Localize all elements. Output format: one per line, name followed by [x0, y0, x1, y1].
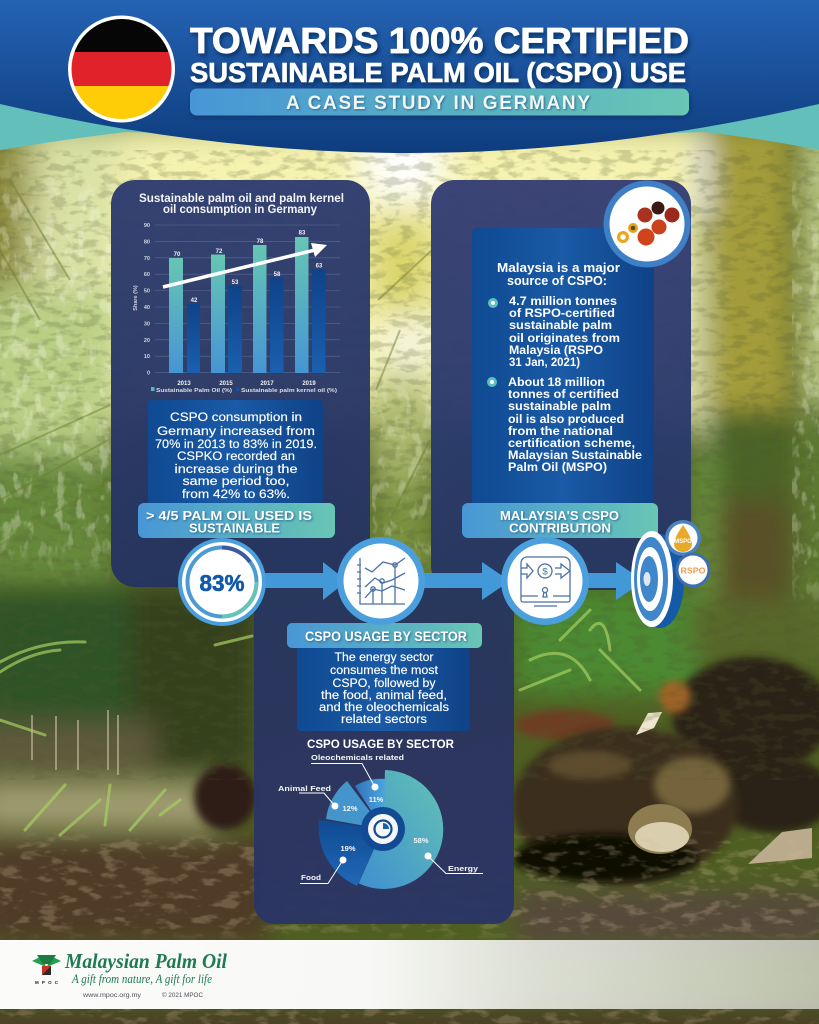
footer band	[0, 940, 819, 1009]
bar chart: 70	[144, 256, 150, 262]
bar chart: 20	[144, 338, 150, 344]
arrow: contribution to target	[582, 562, 644, 600]
brand wordmark: A gift from nature, A gift for life	[71, 972, 212, 986]
bar chart: 53	[232, 280, 239, 286]
subtitle pill	[190, 88, 689, 116]
panel: Malaysia source of CSPO	[431, 180, 691, 590]
legend	[151, 387, 337, 394]
percent labels: 58%	[413, 836, 429, 845]
bullet: 4.7 million tonnes: sustainable palm	[509, 318, 612, 332]
text block: CSPO consumption: same period too,	[182, 476, 290, 488]
bar chart: 72	[216, 249, 223, 255]
palm fruit bunches	[194, 657, 819, 883]
bar chart: 90	[144, 223, 150, 229]
text block: CSPO consumption: increase during the	[174, 464, 298, 476]
title: TOWARDS 100% CERTIFIED	[190, 20, 689, 61]
bullet: about 18 million tonnes: Malaysian Sustainable	[508, 448, 642, 462]
heading pill: Malaysia's CSPO contribution	[462, 503, 658, 538]
brand wordmark	[64, 949, 227, 986]
icon: target with certification badges	[631, 520, 710, 628]
pie chart: usage by sector: Food	[301, 873, 321, 882]
bullet: 4.7 million tonnes: oil originates from	[509, 331, 620, 345]
bullet: about 18 million tonnes: Palm Oil (MSPO)	[508, 460, 607, 474]
bar chart: Share (%)	[133, 285, 139, 311]
segment: Energy 58%	[359, 770, 443, 889]
text block: energy sector: the food, animal feed,	[321, 690, 447, 702]
bar chart: 83	[299, 230, 306, 236]
arrow: sector usage to contribution	[420, 562, 510, 600]
pie chart: usage by sector	[278, 753, 483, 889]
bar chart: 42	[191, 298, 198, 304]
bar chart: 58	[274, 272, 281, 278]
text block: CSPO consumption: Germany increased from	[157, 426, 315, 438]
subtitle pill: A CASE STUDY IN GERMANY	[286, 93, 590, 114]
bar chart: 2019	[302, 381, 316, 387]
text block: energy sector	[297, 645, 470, 731]
text block: CSPO consumption	[148, 400, 323, 512]
bar chart: 2017	[260, 381, 274, 387]
bullet: about 18 million tonnes	[487, 375, 642, 474]
arrow: 83% to sector usage	[262, 562, 347, 600]
header banner	[0, 0, 819, 153]
bullet: 4.7 million tonnes: Malaysia (RSPO	[509, 343, 603, 357]
icon: line chart badge	[337, 537, 425, 625]
panel: CSPO usage by sector content	[278, 623, 483, 889]
segment: Food 19%	[319, 820, 383, 886]
bullet: 4.7 million tonnes	[488, 294, 620, 369]
segment: Animal Feed 12%	[326, 781, 383, 829]
panel: consumption chart	[111, 180, 370, 587]
bar chart: 2013	[177, 381, 191, 387]
title	[190, 20, 689, 88]
bar chart	[133, 223, 340, 394]
heading pill: Malaysia's CSPO contribution: CONTRIBUTION	[509, 520, 611, 536]
percent labels: 12%	[342, 804, 358, 813]
bar chart: 10	[144, 354, 150, 360]
icon: 83% progress ring	[178, 538, 266, 626]
bar chart: 2015	[219, 381, 233, 387]
pie chart: usage by sector: Energy	[448, 864, 479, 873]
pie chart: usage by sector: Oleochemicals related	[311, 753, 404, 762]
heading pill: palm oil used is sustainable: SUSTAINABLE	[189, 520, 280, 536]
bar chart: 80	[144, 239, 150, 245]
bullet: about 18 million tonnes: from the national	[508, 424, 613, 438]
heading pill: palm oil used is sustainable: > 4/5 PALM OIL USED IS	[146, 508, 312, 523]
heading pill: CSPO usage by sector	[287, 623, 482, 648]
panel: bottom usage by sector background	[254, 575, 514, 924]
target	[631, 531, 684, 628]
pie chart: usage by sector: Animal Feed	[278, 784, 331, 793]
title: SUSTAINABLE PALM OIL (CSPO) USE	[190, 57, 686, 88]
bullet: 4.7 million tonnes: 31 Jan, 2021)	[509, 355, 580, 369]
percent labels	[340, 795, 429, 853]
bar chart: 63	[316, 264, 323, 270]
arrow: upward trend	[163, 243, 327, 287]
bullet: 4.7 million tonnes: 4.7 million tonnes	[509, 294, 617, 308]
chart heading	[139, 193, 344, 216]
text block: energy sector: CSPO, followed by	[332, 678, 436, 690]
heading pill: palm oil used is sustainable	[138, 503, 335, 538]
logo: MPOC	[32, 955, 61, 985]
text block: CSPO consumption: 70% in 2013 to 83% in 2019.	[155, 439, 317, 451]
teal curved ribbon	[0, 100, 819, 150]
percent labels: 11%	[369, 795, 384, 804]
heading pill: Malaysia's CSPO contribution: MALAYSIA'S CSPO	[500, 508, 619, 523]
icon: monitor with dollar badge: $	[542, 566, 548, 578]
icon: 83% progress ring: 83%	[200, 570, 244, 596]
text block: energy sector: related sectors	[341, 714, 427, 726]
text block: Malaysia facts: source of CSPO:	[507, 274, 607, 288]
chart heading: CSPO USAGE BY SECTOR	[307, 737, 454, 751]
legend: Sustainable palm kernel oil (%)	[241, 388, 337, 394]
bullet: about 18 million tonnes: tonnes of certified	[508, 387, 619, 401]
blue curved header	[0, 0, 819, 153]
badge: RSPO: RSPO	[680, 566, 706, 576]
bar chart: 0	[147, 371, 150, 377]
bar chart: 40	[144, 305, 150, 311]
heading pill: CSPO usage by sector: CSPO USAGE BY SECTOR	[305, 628, 467, 644]
legend: Sustainable Palm Oil (%)	[156, 388, 232, 394]
icon: German flag badge	[68, 15, 175, 123]
leader lines and labels	[299, 764, 483, 884]
footer credits	[82, 991, 203, 999]
chart heading: oil consumption in Germany	[163, 204, 318, 216]
text block: CSPO consumption: CSPO consumption in	[170, 412, 302, 424]
bar chart: 78	[257, 239, 264, 245]
logo: MPOC: MPOC	[35, 980, 59, 985]
bullet: about 18 million tonnes: sustainable palm	[508, 399, 611, 413]
segment: Oleochemicals 11%	[355, 779, 385, 829]
icon: palm fruits badge	[604, 180, 690, 268]
bullet: about 18 million tonnes: certification scheme,	[508, 436, 635, 450]
text block: energy sector: and the oleochemicals	[319, 702, 449, 714]
text block: CSPO consumption: CSPKO recorded an	[177, 451, 295, 463]
text block: Malaysia facts	[472, 228, 654, 513]
bullet: 4.7 million tonnes: of RSPO-certified	[509, 306, 615, 320]
bar chart: 60	[144, 272, 150, 278]
percent labels: 19%	[340, 844, 356, 853]
bar chart: 30	[144, 321, 150, 327]
text block: energy sector: consumes the most	[330, 665, 439, 677]
bar chart: 70	[174, 252, 181, 258]
pie hub	[361, 807, 405, 851]
icon: monitor with dollar badge	[501, 537, 589, 625]
bar chart: 50	[144, 288, 150, 294]
badge: MSPO: MSPO	[674, 539, 692, 545]
footer credits: www.mpoc.org.my	[82, 992, 142, 999]
text block: Malaysia facts: Malaysia is a major	[497, 261, 620, 275]
footer credits: © 2021 MPOC	[162, 991, 203, 999]
bullet: about 18 million tonnes: oil is also produced	[508, 412, 624, 426]
chart heading: Sustainable palm oil and palm kernel	[139, 193, 344, 205]
text block: energy sector: The energy sector	[334, 652, 434, 664]
brand wordmark: Malaysian Palm Oil	[64, 949, 227, 973]
text block: CSPO consumption: from 42% to 63%.	[182, 489, 290, 501]
bullet: about 18 million tonnes: About 18 million	[508, 375, 605, 389]
